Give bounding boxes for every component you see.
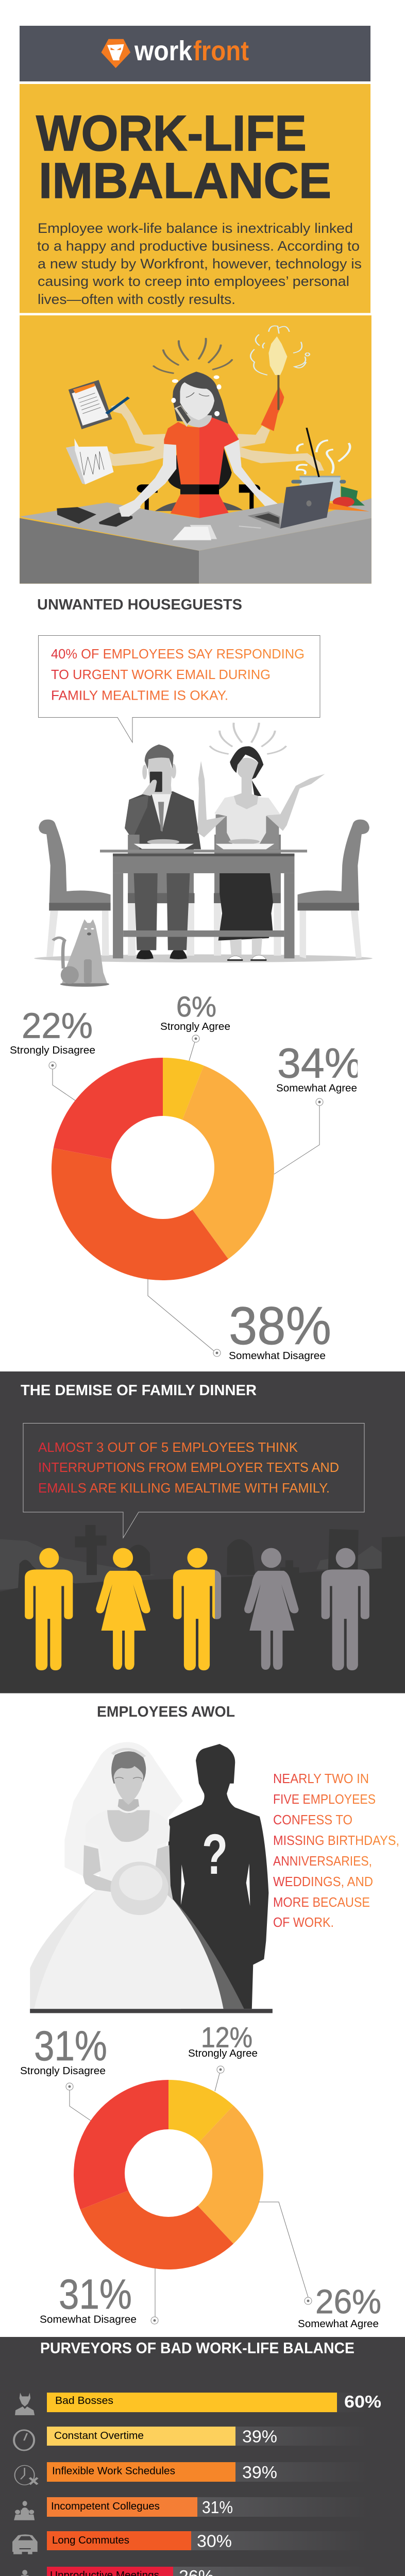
illustration: couple at dinner table with cat [34, 723, 373, 987]
introduction text: Employee work-life balance is inextricably linked [38, 221, 353, 236]
icon: woman 2 [244, 1548, 299, 1670]
callout: 22% strongly disagree: Strongly Disagree [10, 1045, 95, 1056]
callout: 12% strongly agree: 12% [201, 2021, 252, 2054]
hand on calculator [119, 500, 141, 517]
table [100, 850, 307, 958]
title: IMBALANCE [39, 152, 331, 209]
plates and food [134, 839, 274, 850]
bar: incompetent colleagues: 31% [202, 2498, 233, 2517]
speech bubble: 40% of employees: FAMILY MEALTIME IS OKAY. [51, 687, 228, 703]
callout: 12% strongly agree: Strongly Agree [188, 2048, 258, 2059]
bar: inflexible work schedules: Inflexible Work Schedules [52, 2466, 175, 2477]
calculator [99, 513, 132, 527]
icon: devil boss [15, 2393, 35, 2415]
icon: car [12, 2534, 38, 2554]
icon: confused colleagues [14, 2501, 35, 2520]
callout: 31% somewhat disagree: Somewhat Disagree [40, 2314, 137, 2326]
callout: 31% strongly disagree [20, 2023, 107, 2121]
header bar [20, 26, 370, 81]
bar: bad bosses [47, 2392, 381, 2412]
callout: 26% somewhat agree [259, 2202, 381, 2330]
duster [268, 336, 287, 410]
icon: woman 1 [96, 1548, 150, 1670]
heading: unwanted houseguests: UNWANTED HOUSEGUESTS [37, 597, 242, 613]
donut chart: 40% houseguests responses [52, 1058, 274, 1280]
papers [66, 438, 114, 484]
vegetables [329, 486, 369, 512]
bar: incompetent colleagues [47, 2497, 366, 2517]
callout: 31% somewhat disagree [40, 2268, 158, 2326]
closed eyes [186, 393, 209, 397]
callout: 6% strongly agree: 6% [176, 990, 216, 1023]
binder [57, 507, 96, 523]
main arms [119, 440, 280, 517]
text: nearly two in five employees: MORE BECAUSE [273, 1894, 370, 1910]
callout: 31% strongly disagree: Strongly Disagree [20, 2065, 106, 2077]
speech bubble: ALMOST 3 OUT OF 5 EMPLOYEES THINK [38, 1439, 298, 1455]
chair [137, 447, 260, 511]
bar: constant overtime: 39% [242, 2427, 277, 2446]
hair [173, 371, 229, 425]
laptop [247, 482, 333, 529]
icon: cat [53, 919, 109, 987]
bride [30, 1742, 244, 2009]
left dining chair [39, 820, 111, 957]
bar: long commutes: Long Commutes [52, 2535, 129, 2546]
text: nearly two in five employees [273, 1771, 399, 1930]
callout: 6% strongly agree [160, 990, 230, 1061]
man [125, 744, 201, 959]
logo wordmark: work [134, 36, 193, 66]
donut chart: missing life events responses [74, 2080, 263, 2269]
bar: long commutes [47, 2531, 366, 2551]
bar: incompetent colleagues: Incompetent Collegues [51, 2501, 160, 2512]
bar: bad bosses: Bad Bosses [55, 2395, 113, 2406]
bar: inflexible work schedules [47, 2462, 366, 2482]
callout: 34% somewhat agree: 34% [277, 1040, 362, 1087]
stress lines [154, 338, 232, 373]
panel: title and introduction [20, 84, 370, 313]
heading: THE DEMISE OF FAMILY DINNER [21, 1382, 257, 1399]
callout: 34% somewhat agree [274, 1048, 358, 1175]
callout: 34% somewhat agree: Somewhat Agree [276, 1083, 357, 1094]
icon: meeting [14, 2570, 36, 2576]
panel: the demise of family dinner [0, 1371, 405, 1693]
woman [197, 723, 325, 961]
callout: 26% somewhat agree: Somewhat Agree [298, 2318, 379, 2330]
icons for upper bars [12, 2393, 38, 2576]
panel: purveyors of bad work-life balance [0, 2337, 405, 2576]
bar: unproductive meetings [47, 2567, 366, 2576]
heading: PURVEYORS OF BAD WORK-LIFE BALANCE [40, 2340, 355, 2357]
callout: 31% somewhat disagree: 31% [59, 2271, 132, 2318]
logo wordmark [134, 36, 249, 66]
bar: long commutes: 30% [197, 2532, 232, 2551]
text: nearly two in five employees: CONFESS TO [273, 1812, 352, 1827]
callout: 12% strongly agree [188, 2021, 258, 2091]
speech bubble: 40% of employees: 40% OF EMPLOYEES SAY RESPONDING [51, 646, 305, 662]
clipboard with document [69, 380, 112, 429]
speech bubble: EMAILS ARE KILLING MEALTIME WITH FAMILY. [38, 1480, 330, 1496]
callout: 38% somewhat disagree: 38% [229, 1296, 331, 1356]
face [180, 382, 214, 420]
speech bubble: INTERRUPTIONS FROM EMPLOYER TEXTS AND [38, 1460, 339, 1475]
dress [164, 417, 239, 518]
pencil [239, 526, 261, 528]
introduction text: causing work to creep into employees’ personal [38, 274, 349, 289]
speech bubble: 40% of employees: TO URGENT WORK EMAIL DURING [51, 667, 271, 682]
neck [186, 414, 212, 428]
logo wordmark: front [193, 36, 249, 66]
heading: employees awol: EMPLOYEES AWOL [97, 1704, 235, 1720]
callout: 26% somewhat agree: 26% [315, 2282, 381, 2320]
floor shadow [34, 954, 373, 962]
people icons: 3 of 5 highlighted [25, 1548, 369, 1670]
callout: 22% strongly disagree: 22% [22, 1006, 93, 1046]
introduction text: a new study by Workfront, however, technology is [38, 256, 362, 272]
panel: multitasking woman illustration [20, 315, 372, 584]
duster dust clouds [250, 326, 310, 375]
callout: 38% somewhat disagree [148, 1279, 331, 1362]
callout: 38% somewhat disagree: Somewhat Disagree [229, 1350, 326, 1362]
icon: clock with x [15, 2465, 38, 2485]
introduction text [37, 221, 362, 307]
callout: 22% strongly disagree [10, 1006, 95, 1100]
text: nearly two in five employees: NEARLY TWO IN [273, 1771, 369, 1786]
introduction text: to a happy and productive business. According to [37, 238, 360, 253]
rubber glove [261, 386, 284, 431]
icon: man 1 [25, 1548, 73, 1670]
bar: bad bosses: 60% [344, 2392, 381, 2411]
text: nearly two in five employees: FIVE EMPLOYEES [273, 1791, 376, 1807]
desk [20, 498, 372, 584]
illustration: bride and missing groom [30, 1742, 273, 2013]
question mark on groom: ? [202, 1823, 228, 1886]
sweat drops [171, 376, 222, 416]
text: nearly two in five employees: WEDDINGS, AND [273, 1874, 373, 1889]
bar: inflexible work schedules: 39% [242, 2463, 277, 2482]
extra arms [107, 402, 324, 471]
text: nearly two in five employees: OF WORK. [273, 1914, 334, 1930]
speech bubble [23, 1423, 364, 1538]
back chairs [128, 835, 281, 956]
pen [107, 397, 129, 414]
desk papers [173, 525, 217, 540]
callout: 31% strongly disagree: 31% [34, 2023, 107, 2070]
speech bubble: 40% of employees [38, 636, 320, 742]
icon: workfront lion logo [102, 39, 130, 68]
floor bar [30, 2009, 273, 2013]
phone [174, 405, 191, 427]
graveyard silhouette [0, 1525, 405, 1693]
pot, spoon and steam [291, 428, 350, 501]
right dining chair [297, 820, 369, 958]
groom silhouette [165, 1744, 268, 2009]
bar: constant overtime [47, 2427, 366, 2446]
text: nearly two in five employees: ANNIVERSARIES, [273, 1853, 372, 1869]
icon: man 2 partly filled [173, 1548, 221, 1670]
title [36, 105, 331, 209]
introduction text: lives—often with costly results. [38, 292, 235, 307]
icon: overtime clock [14, 2430, 34, 2450]
bar: constant overtime: Constant Overtime [54, 2430, 144, 2442]
icon: man 3 [322, 1548, 369, 1670]
title: WORK-LIFE [36, 105, 307, 161]
callout: 6% strongly agree: Strongly Agree [160, 1021, 230, 1032]
